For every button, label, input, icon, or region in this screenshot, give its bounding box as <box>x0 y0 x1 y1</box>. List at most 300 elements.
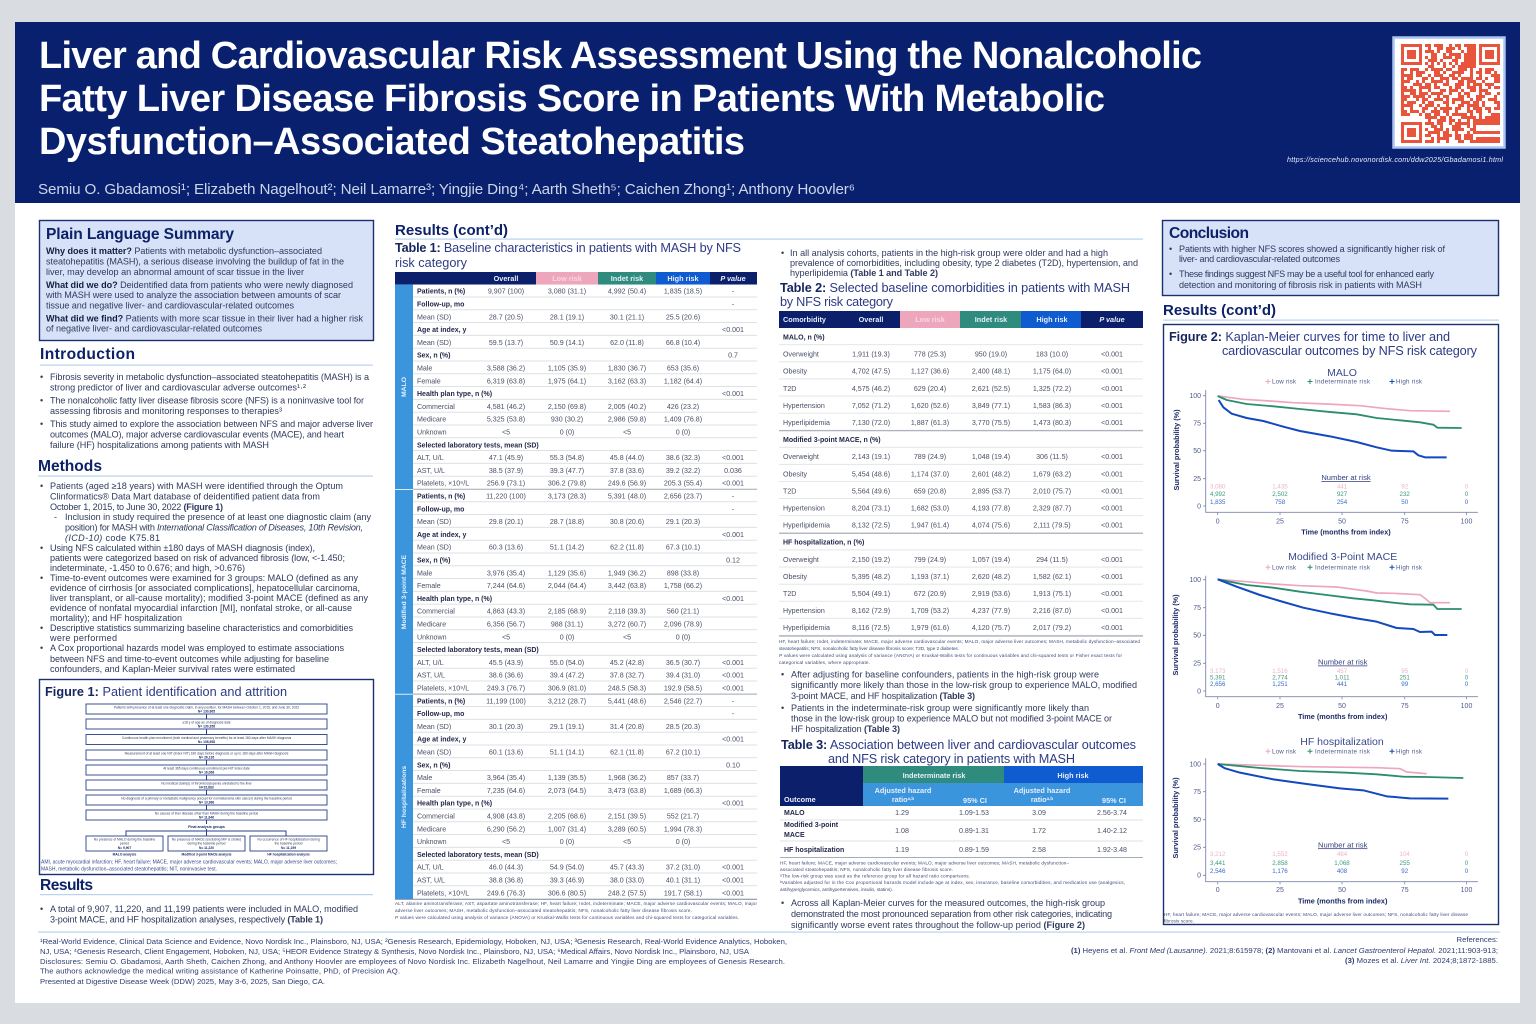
panel: plain language summary <box>40 220 374 340</box>
table 2 values: 2,601 (48.2) <box>972 470 1010 478</box>
table 2 values: 5,504 (49.1) <box>852 590 890 598</box>
table 1 values: 54.9 (54.0) <box>550 864 584 872</box>
chart: MALO: 25 <box>1193 476 1201 483</box>
table 3 rows: 2.56-3.74 <box>1097 809 1127 817</box>
number at risk: 1,251 <box>1272 681 1288 688</box>
table 2 values: 1,583 (86.3) <box>1033 402 1071 410</box>
text: summary body: tissue and negative liver- and cardiovascular-related outcomes <box>46 300 294 310</box>
number at risk: 50 <box>1401 499 1409 506</box>
text: introduction bullets: strong predictor of liver and cardiovascular adverse outcomes¹·² <box>50 382 306 392</box>
title: Dysfunction–Associated Steatohepatitis <box>39 121 745 163</box>
table 1 row labels: Health plan type, n (%) <box>417 801 492 808</box>
number at risk: 4,992 <box>1210 491 1226 498</box>
legend: Low risk <box>1272 748 1297 755</box>
table 2 values: 2,150 (19.2) <box>852 556 890 564</box>
table 1 values: 560 (21.1) <box>667 608 699 616</box>
table 2 values: <0.001 <box>1101 402 1123 410</box>
text: adjusted result bullets: After adjusting for baseline confounders, patients in the high-risk group were <box>791 670 1099 680</box>
number at risk: 1,516 <box>1272 668 1288 675</box>
text: results bullet: A total of 9,907, 11,220, and 11,199 patients were included in MALO, modified <box>50 904 358 914</box>
table 1 row labels: Unknown <box>417 633 447 641</box>
table 2 row labels: Modified 3-point MACE, n (%) <box>783 437 881 444</box>
table 2 values: 1,679 (63.2) <box>1033 470 1071 478</box>
table 1 values: 2,151 (39.5) <box>608 812 646 820</box>
table 2 values: 4,193 (77.8) <box>972 504 1010 512</box>
table 2 row labels: Hyperlipidemia <box>783 419 830 427</box>
heading: introduction: Introduction <box>40 346 135 363</box>
table 1 row labels: Mean (SD) <box>417 748 451 756</box>
table 1 values: <0.001 <box>722 390 744 398</box>
table 1 row labels: Platelets, ×10⁹/L <box>417 684 469 692</box>
table 1 values: 3,162 (63.3) <box>608 377 646 385</box>
table 3 footnote <box>780 860 1125 892</box>
table 2: comorbidities: Low risk <box>915 315 946 324</box>
table 1 values: 4,992 (50.4) <box>608 288 646 296</box>
text: results bullet: • <box>40 904 43 914</box>
legend: High risk <box>1396 748 1423 755</box>
table 3 rows: 2.58 <box>1032 846 1046 854</box>
table 1 row labels: AST, U/L <box>417 876 445 884</box>
table 2 values: 1,193 (37.1) <box>911 573 949 581</box>
table 1 values: 39.4 (31.0) <box>666 672 700 680</box>
table 1 values: 930 (30.2) <box>551 416 583 424</box>
text: methods bullets: Using NFS calculated within ±180 days of MASH diagnosis (index), <box>50 543 315 553</box>
table 1 values: 249.3 (76.7) <box>487 684 525 692</box>
table 2: comorbidities: P value <box>1099 315 1125 324</box>
table 1 row labels: Sex, n (%) <box>417 762 450 769</box>
table 1 values: <0.001 <box>722 889 744 897</box>
heading: methods: Methods <box>38 458 102 475</box>
heading: results continued, middle: Results (cont’d) <box>395 222 508 239</box>
table 1 row labels: ALT, U/L <box>417 659 444 667</box>
flow chart: patient attrition: MALO analysis <box>113 852 136 856</box>
footer: references: References: <box>1457 935 1498 944</box>
table 1 values: 6,356 (56.7) <box>487 620 525 628</box>
table 2 values: 306 (11.5) <box>1036 453 1068 461</box>
chart: HF hospitalization: 0 <box>1197 873 1201 880</box>
text: summary body: of negative liver- and cardiovascular-related outcomes <box>46 324 262 334</box>
text: Kaplan-Meier bullet: significantly worse event rates throughout the follow-up period (Figure 2) <box>791 920 1085 930</box>
text: conclusion bullets: • <box>1169 269 1172 279</box>
table 2 values: 5,395 (48.2) <box>852 573 890 581</box>
number at risk: 3,441 <box>1210 860 1226 867</box>
number at risk: Number at risk <box>1318 658 1368 666</box>
chart: HF hospitalization: 50 <box>1193 817 1201 824</box>
table 2 row labels: Obesity <box>783 368 808 376</box>
chart: MALO: Survival probability (%) <box>1172 409 1181 491</box>
table 3 rows: 1.19 <box>895 846 909 854</box>
number at risk: 0 <box>1465 851 1469 858</box>
table 2 values: 8,116 (72.5) <box>852 624 890 632</box>
table 2 values: 4,702 (47.5) <box>852 368 890 376</box>
table 1 row labels: Selected laboratory tests, mean (SD) <box>417 852 539 859</box>
table 2 values: 1,127 (36.6) <box>911 368 949 376</box>
chart: modified 3-point MACE: 25 <box>1193 661 1201 668</box>
table 3 rows: 1.72 <box>1032 827 1046 835</box>
table 1 values: 2,118 (39.3) <box>608 608 646 616</box>
table 1 values: 62.2 (11.8) <box>610 544 644 552</box>
table 1 values: 0 (0) <box>560 633 574 641</box>
table 1 row labels: Health plan type, n (%) <box>417 391 492 398</box>
number at risk <box>1210 473 1469 506</box>
footer: affiliations and disclosures: The authors acknowledge the medical writing assistance of Katherine Poinsatte, PhD, of Precision AQ. <box>40 966 400 976</box>
table 2 values: <0.001 <box>1101 522 1123 530</box>
table 3 footnote: associated steatohepatitis; NFS, nonalcoholic fatty liver disease fibrosis score. <box>780 867 953 872</box>
number at risk: 0 <box>1465 484 1469 490</box>
table 2 values: <0.001 <box>1101 419 1123 427</box>
table 2 row labels: Hyperlipidemia <box>783 624 830 632</box>
heading: results: Results <box>40 877 93 894</box>
table 1 values: 0 (0) <box>560 428 574 436</box>
table 1 values: 988 (31.1) <box>551 620 583 628</box>
figure 2 footnote: fibrosis score. <box>1164 918 1194 924</box>
survival curves <box>1218 764 1463 799</box>
table 1 values: 29.8 (20.1) <box>489 518 523 526</box>
table 1 footnote <box>395 901 757 920</box>
table 2 values: 1,682 (53.0) <box>911 504 949 512</box>
table 1: baseline characteristics <box>395 272 757 900</box>
table 3 rows: 3.09 <box>1032 809 1046 817</box>
table 2 row labels: T2D <box>783 385 796 393</box>
chart: modified 3-point MACE: 100 <box>1189 577 1201 584</box>
table 2 values: 1,473 (80.3) <box>1033 419 1071 427</box>
chart: MALO: 75 <box>1401 518 1409 526</box>
chart: HF hospitalization: 75 <box>1401 887 1409 894</box>
table 3: hazard ratios: Indeterminate risk <box>903 771 966 780</box>
table 1 values: 6,319 (63.8) <box>487 377 525 385</box>
text: methods bullets: Patients (aged ≥18 years) with MASH were identified through the Optum <box>50 481 343 491</box>
text: conclusion bullets: Patients with higher NFS scores showed a significantly higher risk of <box>1179 244 1445 254</box>
text: adjusted result bullets: • <box>781 703 784 713</box>
table 1 values: 51.1 (14.1) <box>550 748 584 756</box>
table 1 values: 28.7 (18.8) <box>550 518 584 526</box>
text: Kaplan-Meier bullet: demonstrated the most pronounced separation from other risk categories, indicating <box>791 909 1112 919</box>
table 2 values: <0.001 <box>1101 607 1123 615</box>
table 1 values: <0.001 <box>722 800 744 808</box>
number at risk: 758 <box>1275 499 1286 506</box>
table 2 values: 1,325 (72.2) <box>1033 385 1071 393</box>
text: methods bullets: were performed <box>49 633 117 643</box>
text: summary body: Why does it matter? Patients with metabolic dysfunction–associated <box>46 246 322 256</box>
heading: table 1: risk category <box>395 256 468 270</box>
text: conclusion bullets: • <box>1169 244 1172 254</box>
table 3: hazard ratios: a,b <box>1047 796 1053 801</box>
table 1 values: 29.1 (20.3) <box>666 518 700 526</box>
table 2 values: 789 (24.9) <box>914 453 946 461</box>
flow chart: patient attrition: No presence of MACE (excluding MIF & stroke) <box>172 838 241 842</box>
table 1 values: <0.001 <box>722 736 744 744</box>
text: introduction bullets: outcomes (MALO), major adverse cardiovascular events (MACE), and heart <box>50 430 344 440</box>
text: adjusted result bullets: those in the low-risk group to experience MALO but not modified 3-point MACE or <box>791 714 1112 724</box>
heading: table 2: by NFS risk category <box>780 295 894 309</box>
table 2 row labels: Hypertension <box>783 504 825 512</box>
table 3 rows: 0.89-1.59 <box>959 846 989 854</box>
table 1 values: 2,205 (68.6) <box>548 812 586 820</box>
table 2 values: 4,575 (46.2) <box>852 385 890 393</box>
chart: modified 3-point MACE: 50 <box>1193 633 1201 640</box>
footer: affiliations and disclosures: ¹Real-World Evidence, Clinical Data Science and Evidence, Novo Nordisk Inc., Plainsboro, NJ, USA; ²Genesis Research, Epidemiology, Hoboken, NJ, USA; ³Genesis Research, Real-World Evidence Analytics, Hoboken, <box>40 937 787 946</box>
flow chart: patient attrition: Patients with presence of at least one diagnostic claim, in any position, for MASH between October 1, 2015, and June 30, 2022 <box>114 706 299 710</box>
table 2: comorbidities <box>779 311 1143 636</box>
text: summary body: What did we find? Patients with more scar tissue in their liver had a higher risk <box>46 314 363 324</box>
table 2 values: 8,162 (72.9) <box>852 607 890 615</box>
chart: modified 3-point MACE <box>1171 551 1478 721</box>
table 2 row labels: Overweight <box>783 453 819 461</box>
number at risk: 104 <box>1400 851 1410 858</box>
table 3: hazard ratios: 95% CI <box>1102 796 1126 805</box>
table 1 values: 31.4 (20.8) <box>610 723 644 731</box>
table 2 values: 8,132 (72.5) <box>852 522 890 530</box>
text: adjusted result bullets <box>781 670 1137 734</box>
table 1 values: 5,325 (53.8) <box>487 416 525 424</box>
number at risk: 95 <box>1401 668 1409 675</box>
text: summary body: What did we do? Deidentified data from patients who were newly diagnosed <box>46 280 353 290</box>
chart: MALO: 0 <box>1197 503 1201 510</box>
table 1 row labels: Health plan type, n (%) <box>417 596 492 603</box>
table 1 values: 898 (33.8) <box>667 569 699 577</box>
table 3 rows: 1.09-1.53 <box>959 809 989 817</box>
number at risk: 1,068 <box>1334 860 1350 867</box>
text: methods bullets: Inclusion in study required the presence of at least one diagnostic claim (any <box>65 512 371 522</box>
table 3 rows: 1.92-3.48 <box>1097 846 1127 854</box>
text: methods bullets: indeterminate, -1.450 to 0.676; and high, >0.676) <box>50 563 245 573</box>
table 2 footnote <box>779 639 1140 665</box>
table 1 row labels: Commercial <box>417 812 455 820</box>
table 1 values: <0.001 <box>722 326 744 334</box>
table 1 values: 38.0 (33.0) <box>610 876 644 884</box>
table 1 values: 2,096 (78.9) <box>664 620 702 628</box>
table 3 rows <box>784 809 1127 854</box>
table 1 row labels: Unknown <box>417 428 447 436</box>
footer: references <box>1071 935 1498 965</box>
table 1 values: 426 (23.2) <box>667 403 699 411</box>
table 3 footnote: ᵇVariables adjusted for in the Cox proportional hazards model include age at index, sex, insurance, baseline comorbidities, and medication use (analgesics, <box>780 880 1125 885</box>
table 1 values: 1,105 (35.9) <box>548 364 586 372</box>
table 2 values: <0.001 <box>1101 504 1123 512</box>
legend: High risk <box>1396 564 1423 571</box>
table 3: hazard ratios: Adjusted hazard <box>1014 786 1070 795</box>
table 1 row labels: Female <box>417 787 441 795</box>
table 1 values: 248.5 (58.3) <box>608 684 646 692</box>
footer: affiliations and disclosures: Presented at Digestive Disease Week (DDW) 2025, May 3-6, 2025, San Diego, CA. <box>40 977 325 986</box>
table 2 values: 2,620 (48.2) <box>972 573 1010 581</box>
chart: MALO: 50 <box>1193 448 1201 455</box>
table 2 values: <0.001 <box>1101 590 1123 598</box>
table 1 values: 55.3 (54.8) <box>550 454 584 462</box>
table 1 values: 4,908 (43.8) <box>487 812 525 820</box>
chart: HF hospitalization: 75 <box>1193 789 1201 796</box>
table 1 values: 1,994 (78.3) <box>664 825 702 833</box>
table 1 values: 60.3 (13.6) <box>489 544 523 552</box>
table 1 values: 7,235 (64.6) <box>487 787 525 795</box>
legend: High risk <box>1396 378 1423 386</box>
flow chart: patient attrition: N= 13,986 <box>199 800 214 804</box>
table 1 values: <0.001 <box>722 531 744 539</box>
table 2: comorbidities: Overall <box>859 315 883 324</box>
number at risk <box>1210 658 1469 688</box>
table 1 row labels: Platelets, ×10⁹/L <box>417 889 469 897</box>
title: Liver and Cardiovascular Risk Assessment Using the Nonalcoholic <box>39 35 1202 77</box>
table 1 values: - <box>732 492 735 500</box>
text: introduction bullets: The nonalcoholic fatty liver disease fibrosis score (NFS) is a noninvasive tool for <box>50 396 364 406</box>
flow chart: patient attrition: N= 11,220 <box>199 846 214 850</box>
chart: HF hospitalization: 100 <box>1189 761 1201 768</box>
text: summary body: with MASH were used to analyze the association between amounts of scar <box>45 290 341 300</box>
table 1 values: 857 (33.7) <box>667 774 699 782</box>
number at risk: 255 <box>1400 860 1410 867</box>
table 1 values: <5 <box>502 428 510 436</box>
table 2 values: <0.001 <box>1101 351 1123 359</box>
table 1 values: 5,391 (48.0) <box>608 492 646 500</box>
table 2 values: 2,111 (79.5) <box>1033 522 1071 530</box>
table 1 values: 249.6 (56.9) <box>608 480 646 488</box>
section: introduction <box>40 346 373 450</box>
table 1 row labels: ALT, U/L <box>417 864 444 872</box>
text: methods bullets: evidence of nonfatal myocardial infarction [MI], nonfatal stroke, or all-cause <box>50 603 352 613</box>
table 1 row labels: Sex, n (%) <box>417 558 450 564</box>
table 1 values: <0.001 <box>722 659 744 667</box>
table 1 side labels: HF hospitalizations <box>401 766 408 828</box>
text: comorbidity bullet <box>781 248 1138 278</box>
table 1 values: <0.001 <box>722 672 744 680</box>
legend: Indeterminate risk <box>1315 748 1371 755</box>
flow chart: patient attrition: No medical claim(s) of thrombocytopenia unrelated to the liver <box>161 782 253 786</box>
number at risk: 3,212 <box>1210 851 1226 858</box>
table 2 values: 1,620 (52.6) <box>911 402 949 410</box>
flow chart: patient attrition: No causes of liver disease other than MASH during the baseline period <box>155 812 258 816</box>
table 2 values <box>852 351 1123 632</box>
table 1 values: 205.3 (55.4) <box>664 480 702 488</box>
table 2 values: 629 (20.4) <box>914 385 946 393</box>
table 3: hazard ratios: ratio <box>892 795 908 804</box>
table 2 values: 2,621 (52.5) <box>972 385 1010 393</box>
text: adjusted result bullets: significantly more likely than those in the low-risk group to experience MALO, modified <box>791 680 1137 690</box>
table 1 row labels: Mean (SD) <box>417 339 451 347</box>
table 2 values: 1,175 (64.0) <box>1033 368 1071 376</box>
table 1 values: 37.8 (32.7) <box>610 672 644 680</box>
table 1 values: 39.3 (47.7) <box>550 467 584 475</box>
text: comorbidity bullet: • <box>781 248 784 258</box>
number at risk: 484 <box>1337 851 1348 858</box>
table 3 footnote: HF, heart failure; MACE, major adverse cardiovascular events; MALO, major adverse liver outcomes; MASH, metabolic dysfunction– <box>780 860 1069 866</box>
table 2 footnote: P values were calculated using analysis of variance (ANOVA) or Kruskal-Wallis tests for continuous variables and chi-squared tests or Fisher exact tests for <box>779 653 1122 658</box>
table 2 values: 4,120 (75.7) <box>972 624 1010 632</box>
text: methods bullets: confounders, and Kaplan-Meier survival rates were estimated <box>50 664 295 674</box>
table 1 values: 1,689 (66.3) <box>664 787 702 795</box>
table 1 values: 1,758 (66.2) <box>664 582 702 590</box>
table 2 values: 294 (11.5) <box>1036 556 1068 564</box>
table 2 values: 4,237 (77.9) <box>972 607 1010 615</box>
figure 2 footnote <box>1164 912 1468 924</box>
number at risk: 927 <box>1337 491 1348 498</box>
table 1 values: 51.1 (14.2) <box>550 544 584 552</box>
chart: modified 3-point MACE: 75 <box>1193 605 1201 612</box>
table 3 rows: MACE <box>784 832 805 839</box>
table 1 values: 37.2 (31.0) <box>666 864 700 872</box>
table 3 rows: 1.29 <box>895 809 909 817</box>
table 1 values: 0 (0) <box>676 633 690 641</box>
table 1 row labels: Male <box>417 774 432 782</box>
text: Kaplan-Meier bullet: Across all Kaplan-Meier curves for the measured outcomes, the high-risk group <box>791 898 1105 908</box>
flow chart: patient attrition: the baseline period <box>275 842 303 846</box>
heading: table 3 <box>781 738 1136 766</box>
table 2 values: <0.001 <box>1101 624 1123 632</box>
table 1 values: 0 (0) <box>676 428 690 436</box>
table 1: baseline characteristics: Indet risk <box>611 274 644 283</box>
text: conclusion bullets <box>1169 244 1445 290</box>
text: methods bullets: October 1, 2015, to June 30, 2022 (Figure 1) <box>50 502 223 512</box>
table 1 values: 653 (35.6) <box>667 364 699 372</box>
number at risk: 2,502 <box>1272 491 1288 498</box>
text: introduction bullets: assessing fibrosis and monitoring responses to therapies³ <box>50 406 282 416</box>
number at risk: 1,835 <box>1210 499 1226 506</box>
table 3: hazard ratios: High risk <box>1057 771 1090 780</box>
table 1 values: 3,173 (28.3) <box>548 492 586 500</box>
table 3 rows: 1.08 <box>895 827 909 835</box>
text: adjusted result bullets: Patients in the indeterminate-risk group were significantly more likely than <box>791 703 1089 713</box>
table 2 values: 2,010 (75.7) <box>1033 487 1071 495</box>
text: methods bullets: • <box>40 481 43 491</box>
table 2 footnote: steatohepatitis; NFS, nonalcoholic fatty liver disease fibrosis score; T2D, type 2 diabetes. <box>779 646 959 651</box>
table 1 values: 40.1 (31.1) <box>666 876 700 884</box>
chart: modified 3-point MACE: Modified 3-Point MACE <box>1288 551 1397 563</box>
table 1 values: 46.0 (44.3) <box>489 864 523 872</box>
table 1 values: 47.1 (45.9) <box>489 454 523 462</box>
table 1 row labels: Commercial <box>417 403 455 411</box>
table 1 values: - <box>732 710 735 718</box>
table 1 values: 67.3 (10.1) <box>666 544 700 552</box>
table 3: hazard ratios: a,b <box>908 796 914 801</box>
table 1 values: <5 <box>623 428 631 436</box>
table 1 row labels: Mean (SD) <box>417 313 451 321</box>
table 1 row labels: Mean (SD) <box>417 518 451 526</box>
table 1 values: 28.1 (19.1) <box>550 313 584 321</box>
table 1 values: 3,289 (60.5) <box>608 825 646 833</box>
table 1 values: 191.7 (58.1) <box>664 889 702 897</box>
table 1 values: 1,830 (36.7) <box>608 364 646 372</box>
table 1 values: 39.2 (32.2) <box>666 467 700 475</box>
QR url: https://sciencehub.novonordisk.com/ddw2025/Gbadamosi1.html <box>1287 155 1503 164</box>
flow chart: patient attrition: No diagnosis of a primary or metastatic malignancy (except for nonmelanoma skin cancer) during the baseline period <box>121 796 292 800</box>
table 1 footnote: ALT, alanine aminotransferase; AST, aspartate aminotransferase; HF, heart failure; Indet, indeterminate; MACE, major adverse cardiovascular events; MALO, major <box>395 901 757 906</box>
number at risk: 92 <box>1401 868 1409 875</box>
number at risk: 0 <box>1465 681 1469 688</box>
table 1 row labels: Patients, n (%) <box>417 698 465 705</box>
text: conclusion bullets: liver- and cardiovascular-related outcomes <box>1179 254 1340 264</box>
legend <box>1266 378 1423 386</box>
table 2: comorbidities: High risk <box>1036 315 1069 324</box>
title: Fatty Liver Disease Fibrosis Score in Patients With Metabolic <box>39 78 1105 120</box>
table 1 values: 25.5 (20.6) <box>666 313 700 321</box>
flow chart: patient attrition: during the baseline period <box>188 842 226 846</box>
table 1 row labels: AST, U/L <box>417 672 445 680</box>
text: methods bullets: evidence of cirrhosis [or associated complications], hepatocellular carcinoma, <box>50 583 360 593</box>
chart: HF hospitalization: 0 <box>1216 887 1220 894</box>
table 1 values: 45.5 (43.9) <box>489 659 523 667</box>
flow chart: patient attrition: N= 9,907 <box>118 846 131 850</box>
table 1 values: - <box>732 300 735 308</box>
flow chart: patient attrition: period <box>120 842 129 846</box>
text: methods bullets: • <box>40 543 43 553</box>
flow chart: patient attrition: Final analysis groups <box>188 825 225 829</box>
table 2 values: 2,143 (19.1) <box>852 453 890 461</box>
table 1 values: 39.3 (46.9) <box>550 876 584 884</box>
flow chart: patient attrition: Measurement of at least one NIT (index NIT) 180 days before diagnosis or up to 180 days after MASH diagnosis <box>125 752 289 756</box>
chart: MALO: 50 <box>1338 518 1346 526</box>
QR code <box>1394 38 1504 148</box>
number at risk: 2,774 <box>1272 674 1288 682</box>
table 1 values: 60.1 (13.6) <box>489 748 523 756</box>
